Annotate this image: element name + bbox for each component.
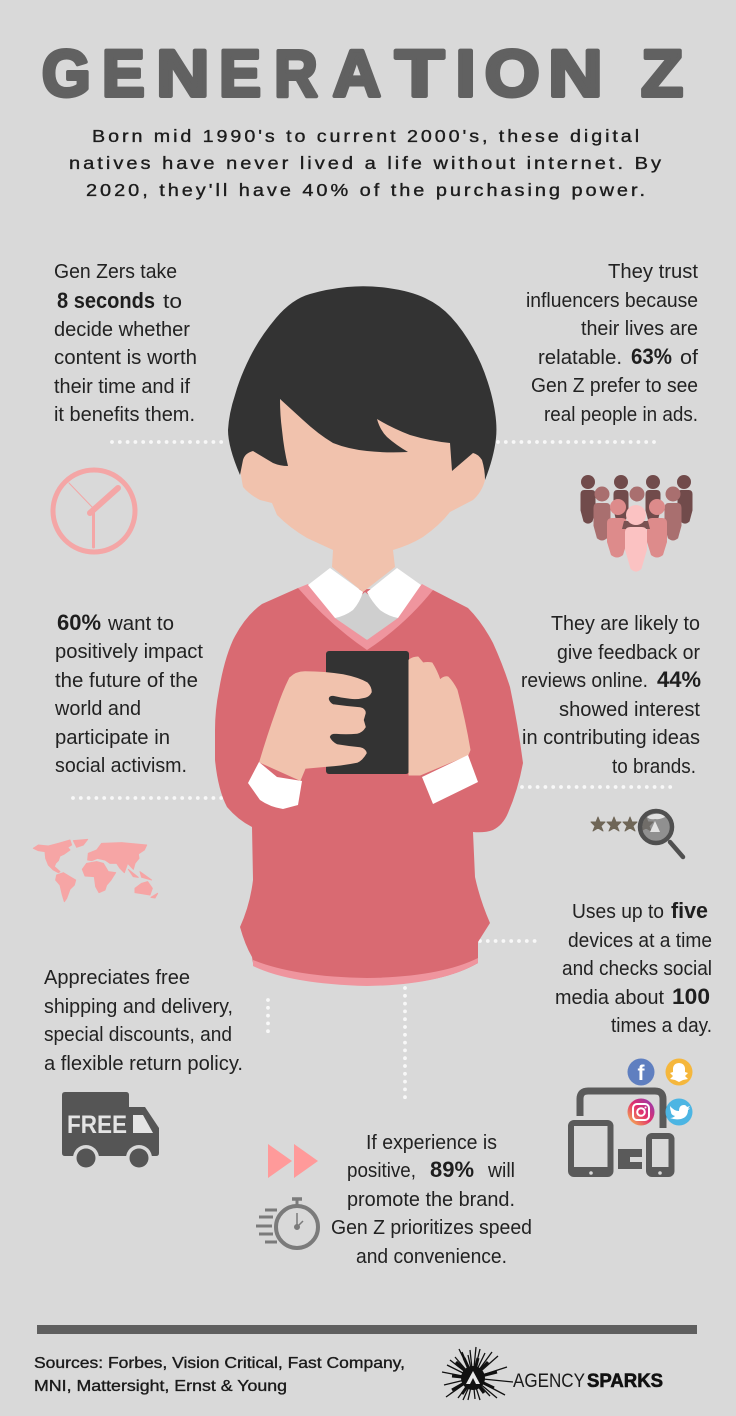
text: influencers: real people in ads. bbox=[544, 404, 698, 426]
text: feedback: in contributing ideas bbox=[522, 727, 700, 749]
icon: crowd of people bbox=[580, 475, 692, 572]
sweater bbox=[215, 588, 523, 985]
right hand bbox=[409, 657, 470, 775]
text: five devices: Uses up to bbox=[572, 901, 664, 923]
text: free shipping: special discounts, and bbox=[44, 1024, 232, 1046]
text: five devices: 100 bbox=[672, 984, 710, 1009]
title: E bbox=[102, 36, 145, 110]
hair bbox=[228, 286, 496, 480]
text: 89% promote: Gen Z prioritizes speed bbox=[331, 1217, 532, 1239]
intro text: Born mid 1990's to current 2000's, these digital bbox=[92, 126, 642, 146]
title: G bbox=[42, 37, 91, 111]
text: 8 seconds bbox=[54, 261, 197, 426]
text: 89% promote: and convenience. bbox=[356, 1246, 507, 1268]
icon: stars and magnifier bbox=[591, 811, 683, 857]
intro text: 2020, they'll have 40% of the purchasing power. bbox=[86, 180, 648, 200]
footer rule bbox=[37, 1325, 697, 1334]
text: 89% promote: promote the brand. bbox=[347, 1189, 515, 1211]
sweater hem bbox=[253, 958, 478, 986]
text: free shipping: shipping and delivery, bbox=[44, 996, 233, 1018]
logo: agency sparks: AGENCY bbox=[513, 1371, 585, 1392]
text: influencers: Gen Z prefer to see bbox=[531, 375, 698, 397]
icon: free delivery truck bbox=[62, 1092, 159, 1171]
text: 8 seconds: content is worth bbox=[54, 347, 197, 369]
text: free shipping bbox=[44, 967, 243, 1075]
title: N bbox=[548, 37, 603, 110]
text: 89% promote bbox=[331, 1132, 532, 1268]
sources bbox=[34, 1355, 405, 1395]
text: feedback: 44% bbox=[657, 667, 701, 692]
text: 60% activism: want to bbox=[107, 613, 174, 635]
sources: MNI, Mattersight, Ernst & Young bbox=[34, 1378, 287, 1395]
text: feedback bbox=[521, 613, 701, 778]
text: 60% activism: participate in bbox=[55, 727, 170, 749]
text: 89% promote: positive, bbox=[347, 1160, 416, 1182]
text: five devices: media about bbox=[555, 987, 664, 1009]
icon: fast forward bbox=[268, 1144, 318, 1178]
text: 60% activism: 60% bbox=[57, 610, 101, 635]
title: N bbox=[156, 37, 209, 110]
left cuff bbox=[248, 762, 302, 809]
text: 8 seconds: decide whether bbox=[54, 319, 190, 341]
text: five devices: and checks social bbox=[562, 958, 712, 980]
phone bbox=[326, 651, 409, 774]
text: feedback: They are likely to bbox=[551, 613, 700, 635]
text: 60% activism: the future of the bbox=[55, 670, 198, 692]
text: 8 seconds: it benefits them. bbox=[54, 404, 195, 426]
facebook: f bbox=[638, 1062, 646, 1085]
intro text: natives have never lived a life without internet. By bbox=[69, 153, 664, 173]
text: 8 seconds: their time and if bbox=[54, 376, 190, 398]
icon: stopwatch bbox=[256, 1199, 318, 1248]
text: feedback: to brands. bbox=[612, 756, 696, 778]
collar bbox=[308, 568, 421, 618]
snapchat bbox=[666, 1058, 692, 1086]
text: 8 seconds: 8 seconds bbox=[57, 288, 155, 313]
title: R bbox=[274, 38, 318, 111]
icon: devices and social media bbox=[571, 1058, 692, 1175]
text: influencers: 63% bbox=[631, 344, 672, 369]
text: 89% promote: 89% bbox=[430, 1157, 474, 1182]
logo: agency sparks bbox=[442, 1347, 663, 1400]
text: feedback: reviews online. bbox=[521, 670, 648, 692]
face and neck bbox=[240, 400, 485, 592]
text: five devices: times a day. bbox=[611, 1015, 712, 1037]
text: feedback: give feedback or bbox=[557, 642, 700, 664]
text: feedback: showed interest bbox=[559, 699, 700, 721]
text: influencers: relatable. bbox=[538, 347, 622, 369]
text: influencers: influencers because bbox=[526, 290, 698, 312]
sources: Sources: Forbes, Vision Critical, Fast Company, bbox=[34, 1355, 405, 1372]
title: A bbox=[333, 37, 381, 111]
illustration: person with phone bbox=[215, 286, 523, 986]
text: influencers bbox=[526, 261, 698, 426]
text: 60% activism: positively impact bbox=[55, 641, 203, 663]
text: 8 seconds: to bbox=[163, 291, 182, 313]
text: 8 seconds: Gen Zers take bbox=[54, 261, 177, 283]
instagram bbox=[628, 1098, 654, 1126]
text: 60% activism: world and bbox=[54, 698, 141, 720]
title: T bbox=[395, 37, 444, 111]
text: free shipping: a flexible return policy. bbox=[44, 1053, 243, 1075]
text: 60% activism: social activism. bbox=[55, 755, 187, 777]
text: free shipping: Appreciates free bbox=[44, 967, 190, 989]
title: E bbox=[219, 37, 261, 111]
left hand bbox=[260, 672, 371, 780]
text: influencers: their lives are bbox=[581, 318, 698, 340]
title: I bbox=[456, 36, 476, 110]
neckline bbox=[298, 584, 433, 650]
icon: free delivery truck: FREE bbox=[67, 1111, 127, 1139]
icon: clock bbox=[53, 470, 135, 552]
text: 60% activism bbox=[54, 610, 203, 777]
logo: agency sparks: SPARKS bbox=[587, 1371, 663, 1392]
icon: world map bbox=[33, 839, 158, 902]
text: five devices bbox=[555, 898, 712, 1037]
text: influencers: of bbox=[680, 347, 698, 369]
twitter bbox=[666, 1098, 692, 1126]
text: 89% promote: will bbox=[487, 1160, 515, 1182]
text: influencers: They trust bbox=[608, 261, 698, 283]
text: 89% promote: If experience is bbox=[366, 1132, 497, 1154]
title: Z bbox=[641, 37, 683, 111]
title: O bbox=[485, 37, 540, 111]
intro text bbox=[69, 126, 664, 200]
text: five devices: five bbox=[671, 898, 708, 923]
title bbox=[42, 36, 683, 111]
right cuff bbox=[422, 755, 478, 804]
text: five devices: devices at a time bbox=[568, 930, 712, 952]
